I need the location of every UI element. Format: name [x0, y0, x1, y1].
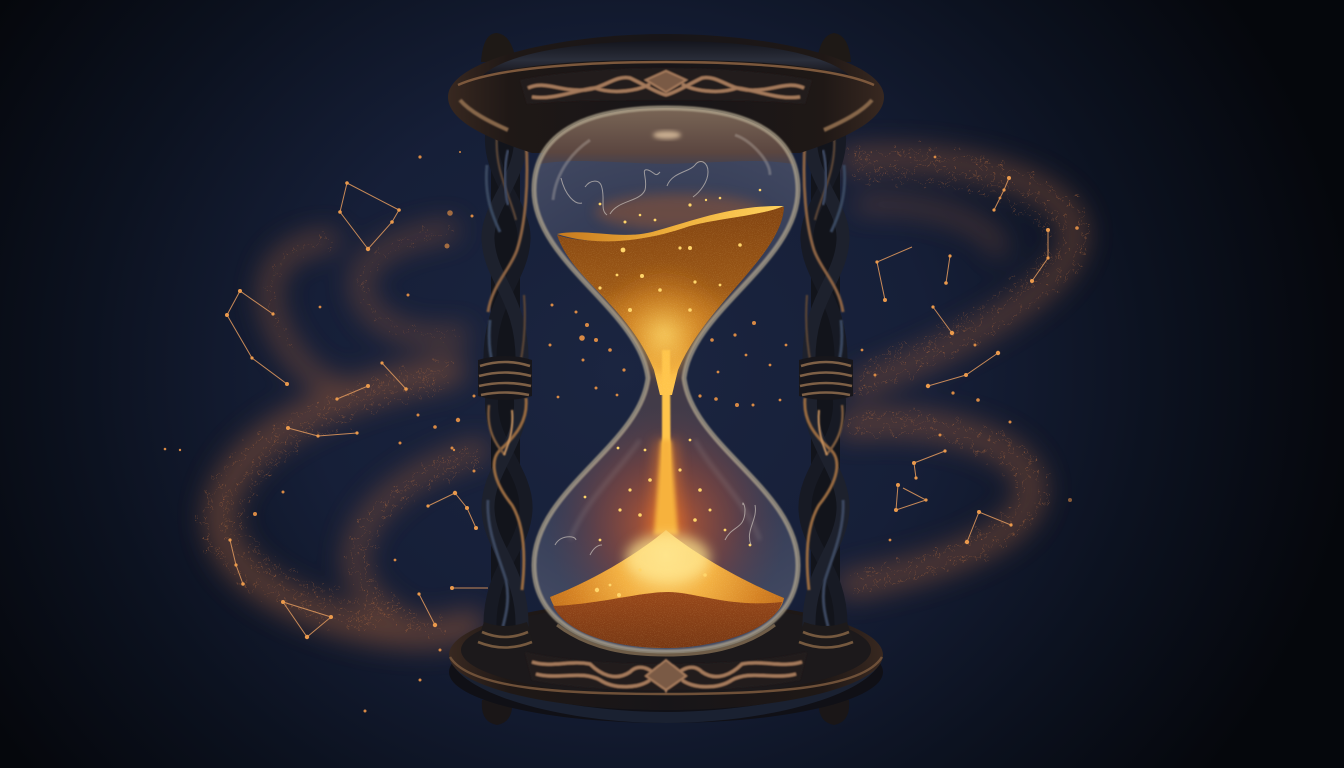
bottom sand mound — [550, 530, 784, 648]
pillar: right — [798, 106, 854, 649]
sand surface highlight — [557, 206, 784, 241]
lower bulb glow — [562, 422, 771, 584]
glass tint — [534, 108, 798, 652]
top sand — [557, 207, 784, 395]
sand grain texture — [550, 200, 790, 650]
glow above top sand — [595, 194, 765, 230]
hourglass glass body and sand — [530, 105, 800, 655]
top cap: ring with carved frieze — [448, 33, 884, 153]
constellation stars — [225, 176, 1050, 639]
bottom base: disc with carved frieze — [449, 600, 883, 725]
constellations: right — [877, 178, 1048, 542]
glass seat on base — [557, 625, 775, 655]
swirl: right dust clouds — [850, 153, 1085, 592]
zodiac line drawings in glass — [555, 161, 755, 555]
feet — [482, 700, 849, 725]
carved frieze — [525, 652, 807, 690]
glass sheen — [553, 135, 770, 200]
particles: loose sparks — [164, 151, 1079, 712]
constellations: left — [227, 183, 488, 637]
finials — [481, 33, 851, 62]
pillar: left — [477, 106, 533, 649]
cap reflection in dome — [534, 108, 798, 165]
glass outline — [534, 108, 798, 652]
carved frieze — [520, 68, 812, 104]
sand sparkles — [584, 189, 761, 597]
falling sand stream — [648, 440, 684, 535]
swirl: left dust clouds — [205, 230, 480, 635]
